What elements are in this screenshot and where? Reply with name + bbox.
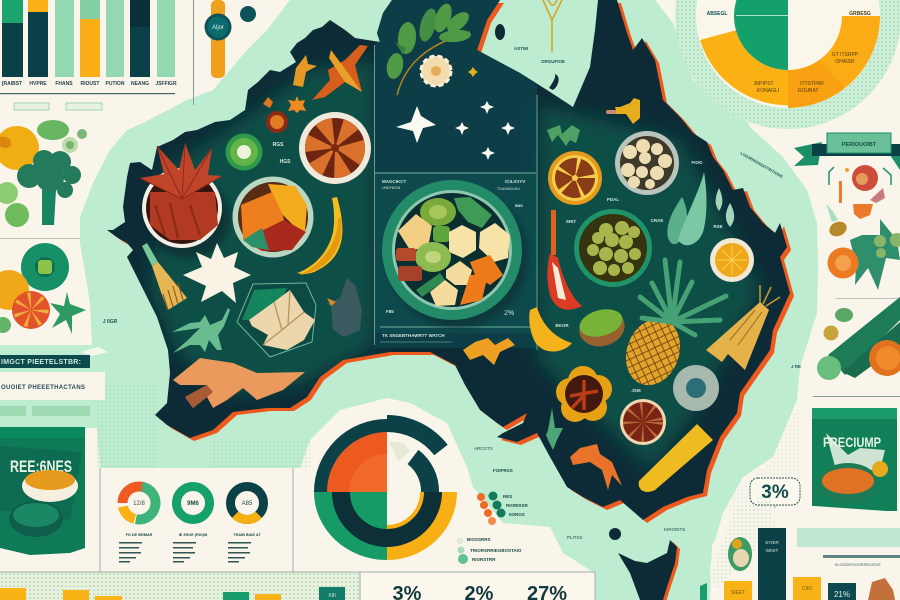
donut labels: OHAISR bbox=[835, 59, 855, 65]
mini legend: RES bbox=[503, 494, 512, 499]
map callout labels west: J IIGR bbox=[103, 319, 118, 325]
map callout labels west: HGS bbox=[280, 159, 291, 165]
mini legend: IIOROS bbox=[509, 512, 525, 517]
west food panel bbox=[0, 120, 87, 334]
3% callout bbox=[750, 478, 800, 520]
left banner bbox=[0, 340, 108, 368]
right bottom bar chart: ELOGSRITIOSRSRCESIG bbox=[835, 563, 881, 567]
donut captions: TRAIB BIAE AT bbox=[233, 533, 261, 537]
mini legend: TRIORSRRIEGBOSTAIO bbox=[470, 548, 522, 553]
leaf branch bbox=[384, 1, 472, 95]
orange half bbox=[869, 340, 900, 376]
citrus slice bbox=[548, 151, 602, 205]
red leaf bowl bbox=[140, 143, 230, 258]
east labels: SRIT bbox=[566, 219, 576, 224]
donut captions: IE 2ROE (RIO)M bbox=[179, 533, 207, 537]
east labels: PDAL bbox=[607, 197, 619, 202]
bar labels: JSFFIGR bbox=[155, 81, 177, 87]
map of Australia bbox=[107, 0, 794, 523]
donut 3: A85 bbox=[242, 501, 253, 507]
3% callout: 3% bbox=[761, 482, 789, 503]
orange apple bbox=[0, 126, 39, 170]
central bowl panel text: F85 bbox=[386, 309, 394, 314]
grey disc bbox=[673, 365, 719, 411]
donut captions: FG DE BRMAR bbox=[126, 533, 153, 537]
donut 2 bbox=[176, 486, 210, 520]
oval item bbox=[728, 537, 752, 571]
left text box: OUOIET PHEEETHACTANS bbox=[1, 385, 85, 391]
central bowl panel text: IBIS bbox=[515, 203, 523, 208]
bar labels: HVPRE bbox=[29, 81, 47, 87]
yellow pepper ring bbox=[556, 366, 612, 422]
bottom-left strip of chips: XIII bbox=[328, 593, 336, 599]
gulf islands and plant bbox=[495, 0, 565, 90]
red leaves bbox=[140, 143, 222, 199]
bar labels: NEANG bbox=[131, 81, 149, 87]
bar labels: FHANS bbox=[55, 81, 73, 87]
right bottom bar chart: SYIER bbox=[765, 540, 779, 545]
wooden fork bbox=[142, 243, 187, 310]
mini legend: RIORSTRR bbox=[472, 557, 496, 562]
right product packet bbox=[812, 408, 897, 511]
tomato bbox=[852, 165, 878, 191]
donut labels: ABSEGL bbox=[707, 11, 727, 17]
donut 3 bbox=[224, 480, 270, 526]
central bowl panel text bbox=[382, 179, 525, 338]
small marks bbox=[829, 167, 891, 185]
donut labels: GOUBAT bbox=[798, 88, 818, 94]
right food items bbox=[813, 165, 900, 397]
left text box bbox=[0, 372, 105, 416]
kiwi bbox=[226, 134, 262, 170]
donut 1 bbox=[119, 483, 159, 523]
bar labels: RIOUST bbox=[81, 81, 99, 87]
flower bbox=[421, 56, 451, 86]
left banner: IMGCT PIEETELSTBR: bbox=[1, 359, 81, 366]
top-right donut chart bbox=[675, 0, 900, 129]
green dinosaur bbox=[172, 308, 230, 353]
right bottom bar chart: SIEET bbox=[731, 590, 745, 596]
east labels: BKOR bbox=[555, 323, 569, 328]
bar notes bbox=[823, 555, 900, 558]
right bottom bar chart: 21% bbox=[834, 590, 850, 599]
donut labels: KONAGLI bbox=[757, 88, 779, 94]
central bowl panel text: TGANMOUSN bbox=[497, 187, 520, 191]
donut labels: GT ITSRPP bbox=[832, 52, 859, 58]
bottom statistics panel bbox=[360, 572, 595, 600]
center-left donut panel bbox=[100, 468, 293, 572]
Tasmania bbox=[609, 528, 680, 600]
banana bbox=[297, 197, 342, 275]
central bowl panel text: TK SNGEBTHAWRTT WATCH bbox=[382, 333, 445, 338]
map-side curved label: LOGIRRIONSIOTRITIONS bbox=[740, 151, 784, 179]
central bowl panel text: UNDFEIGN bbox=[382, 186, 401, 190]
right bottom bar chart: WKIIT bbox=[766, 548, 778, 553]
right bottom bar chart: CIIO bbox=[802, 586, 812, 592]
right banner bbox=[794, 133, 900, 170]
pineapple bbox=[617, 260, 726, 393]
left product packet: REE:6NES bbox=[10, 457, 72, 476]
east labels bbox=[555, 160, 801, 393]
donut 2: 9M6 bbox=[187, 501, 199, 507]
spatula bbox=[547, 210, 582, 310]
right product packet: FRECIUMP bbox=[823, 434, 881, 450]
bar labels bbox=[2, 81, 177, 87]
main donut chart bbox=[314, 419, 457, 560]
central bowl bbox=[382, 180, 528, 328]
east labels: FIOO bbox=[692, 160, 703, 165]
bottom-left strip of chips bbox=[0, 572, 360, 600]
spiced radial bowl bbox=[299, 112, 371, 184]
ginger bbox=[606, 98, 640, 124]
corn bbox=[639, 424, 713, 492]
citrus and tomato bbox=[0, 270, 29, 310]
mini legend: KIRGRITS bbox=[664, 527, 685, 532]
bowl food bbox=[396, 197, 510, 306]
gulf islands and plant: ASTMI bbox=[514, 46, 528, 51]
central bowl panel text: 2% bbox=[504, 310, 514, 317]
central bowl panel text: /CILICIYV bbox=[505, 179, 525, 184]
tall green leaves bbox=[667, 172, 706, 245]
mini legend: RIORISSR bbox=[506, 503, 529, 508]
mini legend bbox=[456, 446, 685, 564]
small kiwi bbox=[575, 305, 629, 351]
icon: watch: Aljor bbox=[212, 25, 224, 31]
bar labels: PUTION bbox=[106, 81, 125, 87]
star plant bbox=[50, 292, 86, 334]
right banner: PERIOUOIBT bbox=[842, 142, 877, 148]
right bottom bar chart bbox=[700, 490, 900, 600]
packet greens bbox=[9, 501, 63, 537]
donut labels bbox=[707, 11, 871, 94]
left product packet bbox=[0, 427, 85, 555]
gulf islands and plant: ORGUFIOE bbox=[541, 59, 565, 64]
orange slice bbox=[828, 248, 858, 278]
donut captions bbox=[126, 533, 261, 537]
small greens bbox=[835, 308, 853, 322]
green garnish leaves bbox=[547, 125, 580, 146]
icon: watch bbox=[204, 0, 256, 78]
blood orange slice bbox=[620, 399, 666, 445]
mini legend: BIOSSRRS bbox=[467, 537, 491, 542]
bar labels: [RAIBST bbox=[2, 81, 22, 87]
mini legend: ARCOTS bbox=[474, 446, 493, 451]
dark textured object bbox=[327, 278, 362, 337]
central bowl panel text: MAGCIKCT bbox=[382, 179, 406, 184]
white star bbox=[183, 243, 251, 303]
donut 1: 12/8 bbox=[133, 501, 145, 507]
donut labels: GRBESG bbox=[849, 11, 871, 17]
east labels: CRAE bbox=[651, 218, 663, 223]
small orange figure and banana bbox=[463, 307, 572, 365]
carrot and pepper bowl bbox=[232, 176, 314, 258]
packet bowl bbox=[22, 470, 78, 502]
map inner panel lines bbox=[374, 45, 537, 350]
mini legend: PLITSS bbox=[567, 535, 583, 540]
cucumbers bbox=[828, 297, 900, 375]
small orange bowl bbox=[710, 238, 754, 282]
top-left bar chart bbox=[0, 0, 194, 110]
broccoli bbox=[17, 150, 81, 225]
orange lizard bbox=[173, 358, 305, 408]
dumpling plate bbox=[237, 283, 316, 357]
olive bbox=[827, 219, 849, 239]
green disc bbox=[21, 243, 69, 291]
map callout labels west bbox=[103, 142, 291, 325]
straw tassel bbox=[706, 285, 780, 370]
small green figure and orange octopus bbox=[546, 408, 622, 490]
nut bowl bbox=[615, 131, 679, 195]
mini legend: FOIPRSS bbox=[493, 468, 513, 473]
green pill and circles bbox=[37, 120, 69, 140]
donut labels: ITTSTPAR bbox=[800, 81, 824, 87]
east labels: JSM bbox=[631, 388, 641, 393]
east labels: J RE bbox=[791, 364, 801, 369]
green food bowl bbox=[574, 209, 652, 287]
Southern Cross stars bbox=[396, 67, 515, 160]
map callout labels west: RGS bbox=[273, 142, 284, 148]
food wedge bbox=[868, 578, 895, 600]
droplets bbox=[716, 188, 734, 227]
herb leaves bbox=[850, 219, 900, 290]
small orange garnishes bbox=[263, 45, 368, 133]
east labels: RSE bbox=[713, 224, 723, 229]
donut labels: BIPIPST bbox=[754, 81, 774, 87]
